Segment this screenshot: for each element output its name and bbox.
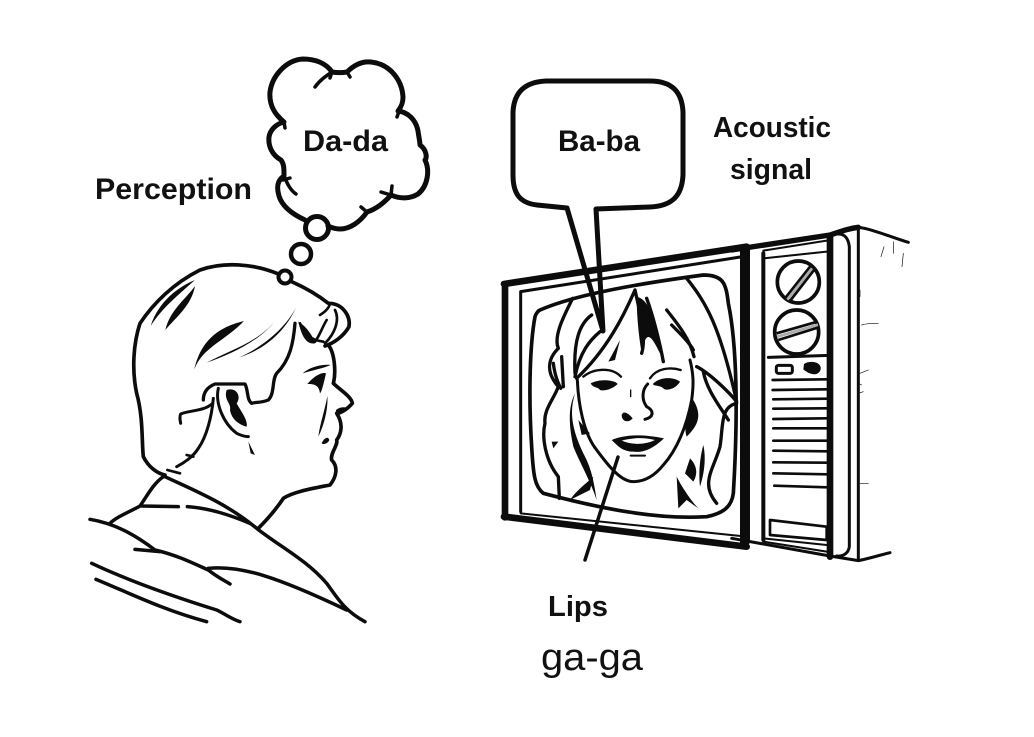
label: Lips: Lips — [548, 591, 608, 623]
tuning knobs — [775, 261, 819, 354]
buttons — [776, 362, 821, 374]
face — [258, 345, 352, 528]
eye and nose details — [303, 365, 348, 444]
tv screen — [530, 275, 736, 517]
hair shading left — [552, 393, 705, 508]
head and hair outline — [134, 265, 279, 475]
label: Acoustic signal: signal — [730, 154, 812, 186]
pointer line to lips — [585, 457, 618, 560]
thought bubble circles — [278, 216, 328, 284]
speaker grille — [773, 379, 827, 487]
television — [504, 227, 908, 561]
tv side specks — [858, 242, 903, 483]
woman's hair — [544, 298, 573, 498]
label: ga-ga: ga-ga — [541, 637, 644, 679]
text: Da-da: Da-da — [303, 125, 388, 158]
neck and shoulders — [90, 477, 365, 622]
tv control panel — [732, 227, 908, 561]
man in profile — [90, 265, 365, 622]
label: Perception: Perception — [95, 173, 252, 206]
text: Ba-ba: Ba-ba — [558, 125, 640, 158]
label: Acoustic signal: Acoustic — [713, 112, 831, 144]
hair strands — [151, 280, 296, 369]
woman's face — [577, 360, 693, 482]
woman's lips — [612, 435, 664, 452]
bottom panel — [770, 520, 827, 540]
label: Acoustic signal — [713, 112, 831, 186]
speech bubble: Ba-ba — [513, 81, 683, 331]
thought bubble: Da-da — [269, 59, 428, 284]
tv front frame and screen — [504, 247, 747, 547]
ear — [177, 388, 255, 467]
